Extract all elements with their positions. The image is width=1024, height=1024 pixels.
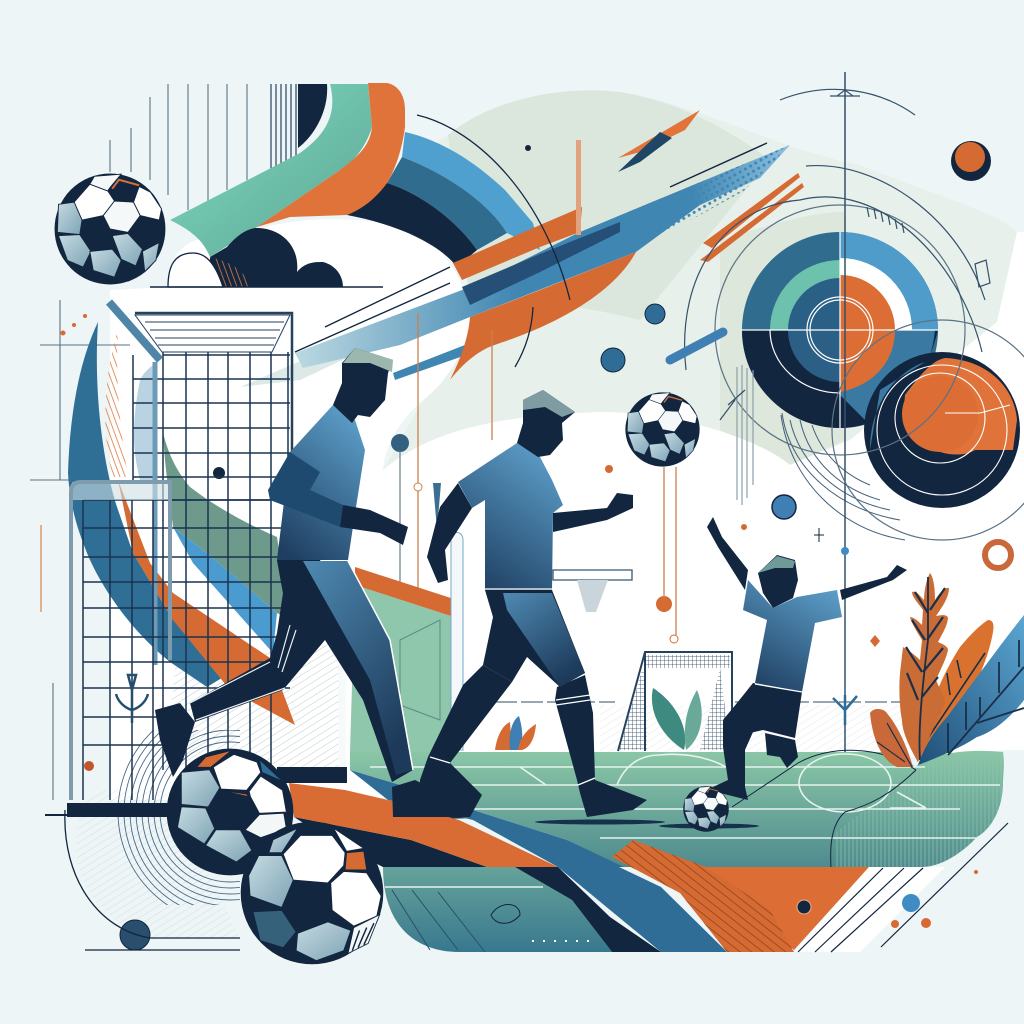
front leg — [713, 720, 753, 800]
player: left adult — [155, 348, 470, 817]
ball: lower left front — [241, 822, 383, 964]
hair — [343, 348, 393, 372]
shirt — [743, 580, 842, 692]
back goal top — [135, 315, 290, 352]
small leaf vein — [877, 723, 912, 767]
concentric fan behind balls — [118, 730, 240, 905]
ball: centre air — [625, 392, 700, 467]
hair — [523, 390, 575, 417]
bottom shapes — [289, 770, 1008, 952]
dark wedge — [294, 817, 487, 867]
shirt hem — [485, 588, 552, 590]
feather branches — [906, 588, 945, 700]
orange triangle — [706, 867, 869, 950]
trouser white edge — [348, 561, 413, 770]
top-left curved bands — [170, 83, 540, 267]
shirt — [458, 443, 563, 590]
front leg dark — [277, 560, 413, 782]
ball: at child's foot — [683, 786, 729, 832]
ball: top left — [55, 174, 165, 284]
small circle top right — [951, 141, 991, 181]
shorts — [723, 683, 802, 738]
shirt hem — [755, 684, 802, 692]
front leg blue — [303, 561, 413, 775]
sock stripes — [430, 695, 595, 785]
plants right — [870, 573, 1024, 767]
ring accent right — [985, 542, 1011, 568]
shirt — [277, 405, 365, 560]
head — [517, 390, 575, 457]
small orange leaf — [870, 709, 913, 767]
goal flower — [116, 675, 148, 723]
cloud shapes — [150, 228, 383, 287]
vertical post — [152, 362, 158, 665]
hatched orange band — [612, 840, 794, 952]
orange ball circle — [864, 352, 1020, 508]
hole — [797, 900, 811, 914]
leg stripes — [190, 625, 296, 720]
blue leaf — [918, 615, 1024, 765]
left leg — [420, 665, 512, 817]
white central space — [110, 219, 1024, 800]
hatched block — [267, 84, 299, 176]
top-left vertical lines — [110, 84, 247, 210]
right arm — [553, 493, 633, 532]
small dots and pendants — [30, 145, 880, 950]
dark platform — [277, 767, 347, 783]
back goal net — [133, 352, 290, 770]
post behind middle player — [451, 532, 463, 750]
broad orange leaf — [917, 620, 993, 762]
pale hatching — [76, 640, 930, 938]
left swoosh — [68, 322, 295, 725]
white dots — [532, 940, 590, 942]
arm — [268, 452, 343, 527]
bent leg — [765, 733, 798, 768]
right arm — [840, 565, 907, 600]
base bar — [67, 803, 175, 817]
thin rings — [685, 72, 1024, 810]
player: middle adult — [420, 390, 647, 817]
front goal net — [83, 500, 290, 800]
back leg — [190, 560, 325, 722]
head — [758, 555, 798, 608]
concentric arcs under circles — [781, 413, 905, 540]
basketball hoop — [553, 570, 632, 612]
field shadows — [350, 813, 759, 828]
orange strip — [289, 783, 558, 867]
slanted post — [109, 302, 160, 360]
broad leaf veins — [922, 653, 985, 747]
goals — [45, 302, 292, 817]
hair — [758, 556, 795, 573]
horizon dashes — [495, 701, 925, 703]
blue path — [350, 770, 624, 867]
player: child — [707, 517, 907, 800]
small shrubs — [495, 688, 857, 750]
white stripes — [794, 867, 945, 952]
back foot — [155, 703, 195, 777]
bottom right dots — [891, 870, 978, 928]
scribble — [491, 904, 520, 923]
ball: lower left middle — [167, 749, 293, 875]
front shoe — [392, 780, 470, 817]
right leg — [555, 675, 647, 817]
feather stem — [919, 577, 928, 760]
teal ground — [383, 867, 612, 952]
teal diagonal lines — [392, 890, 485, 952]
front goal glass — [72, 482, 170, 500]
front goal frame — [71, 482, 170, 800]
target circles — [742, 232, 938, 428]
mid-ground wall — [350, 567, 457, 752]
shorts — [483, 590, 585, 687]
hand — [340, 505, 408, 545]
back goal frame — [135, 313, 292, 500]
field — [350, 750, 1004, 867]
left arm — [707, 517, 748, 590]
left arm — [427, 483, 472, 583]
teal ground lines — [385, 886, 661, 888]
blue leaf veins — [948, 640, 1024, 755]
dark arc — [515, 867, 661, 952]
neck and head — [333, 348, 393, 423]
diagonal streaks — [240, 110, 804, 387]
small goal — [618, 652, 732, 751]
bottom lines — [65, 810, 240, 950]
pale sage backdrop — [383, 90, 1017, 470]
feather leaf — [899, 573, 949, 762]
white post by player — [338, 653, 346, 770]
